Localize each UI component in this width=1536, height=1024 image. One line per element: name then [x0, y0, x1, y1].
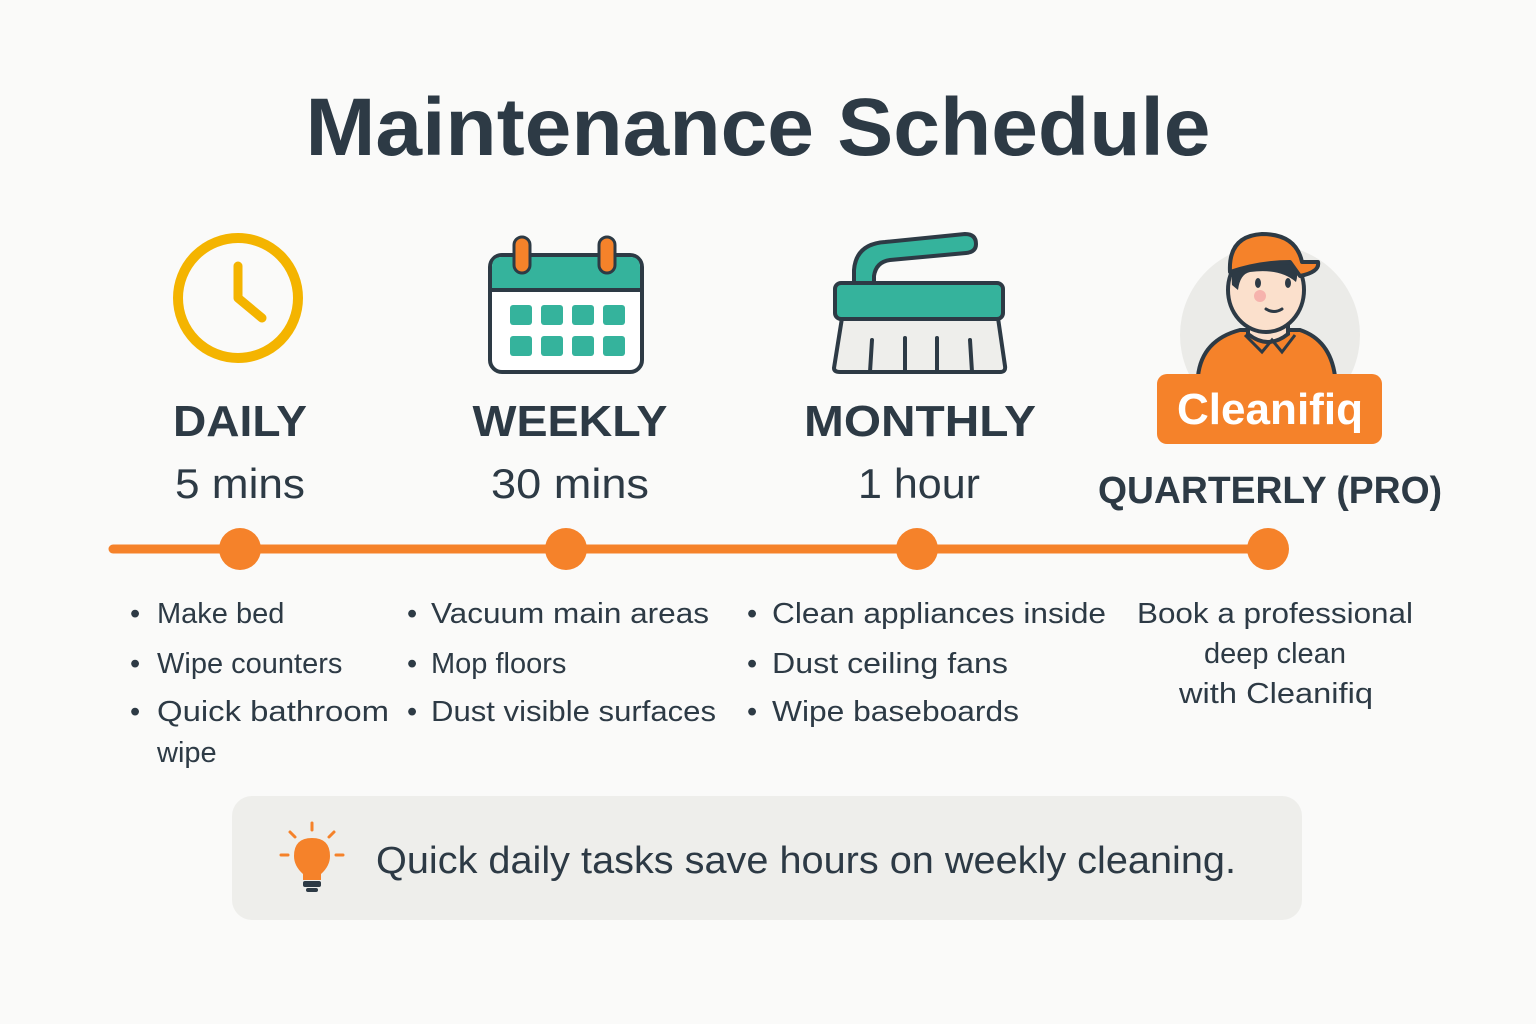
list: monthly: Clean appliances inside [772, 598, 1106, 630]
durations: 1 hour [858, 460, 980, 507]
icon: scrub brush [834, 234, 1005, 372]
icon: calendar [490, 237, 642, 372]
title: Maintenance Schedule [306, 82, 1210, 173]
headings: QUARTERLY (PRO) [1098, 470, 1442, 512]
list: monthly: • [747, 598, 757, 630]
text: quarterly [1137, 598, 1413, 710]
list: monthly [747, 598, 1106, 728]
list: daily: • [130, 598, 140, 630]
text: quarterly: with Cleanifiq [1178, 678, 1373, 710]
headings: WEEKLY [472, 397, 668, 446]
list: daily: Quick bathroom [157, 696, 389, 728]
text: quarterly: deep clean [1204, 638, 1346, 670]
list: daily: • [130, 648, 140, 680]
list: weekly: Vacuum main areas [431, 598, 709, 630]
icon: cleaning professional [1157, 234, 1382, 444]
list: weekly: • [407, 696, 417, 728]
list: monthly: Dust ceiling fans [772, 648, 1008, 680]
list: weekly: Dust visible surfaces [431, 696, 716, 728]
list: daily: Wipe counters [157, 648, 342, 680]
durations [175, 460, 980, 507]
list: weekly: • [407, 598, 417, 630]
list: weekly [407, 598, 716, 728]
durations: 30 mins [491, 460, 649, 507]
list: weekly: • [407, 648, 417, 680]
list: monthly: • [747, 648, 757, 680]
icon: clock [178, 238, 298, 358]
callout: tip [232, 796, 1302, 920]
headings: DAILY [173, 397, 307, 446]
list: monthly: Wipe baseboards [772, 696, 1019, 728]
text: quarterly: Book a professional [1137, 598, 1413, 630]
headings [173, 397, 1442, 512]
icon: light bulb [281, 823, 343, 892]
list: daily: • [130, 696, 140, 728]
timeline [113, 528, 1289, 570]
callout: tip: Quick daily tasks save hours on weekly cleaning. [376, 840, 1236, 882]
badge: Cleanifiq [1157, 374, 1382, 444]
headings: MONTHLY [804, 397, 1036, 446]
list: weekly: Mop floors [431, 648, 566, 680]
badge: Cleanifiq: Cleanifiq [1177, 385, 1363, 434]
durations: 5 mins [175, 460, 305, 507]
list: daily: Make bed [157, 598, 284, 630]
list: daily: wipe [156, 737, 217, 769]
list: monthly: • [747, 696, 757, 728]
list: daily [130, 598, 389, 769]
